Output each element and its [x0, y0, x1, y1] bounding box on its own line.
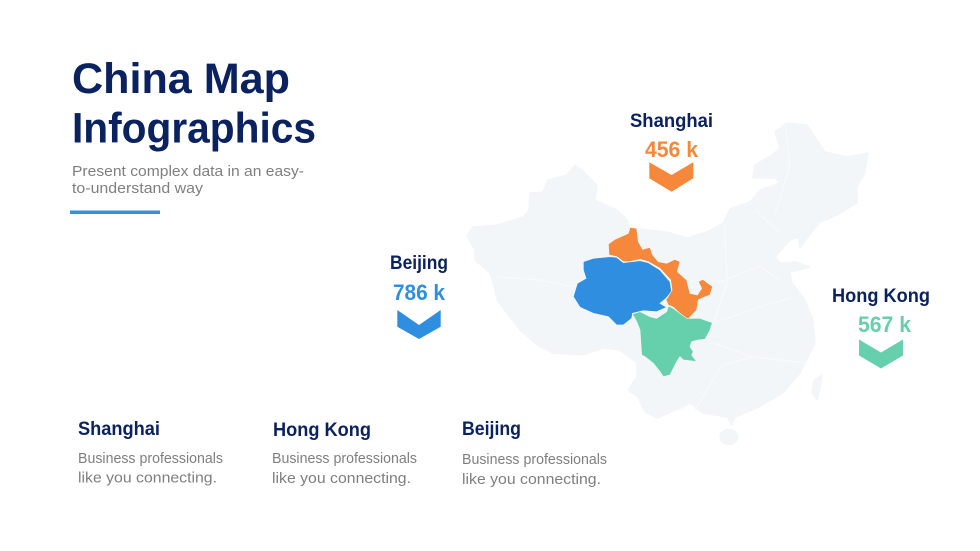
callout: Hong Kong: Hong Kong: [832, 286, 930, 307]
title underline accent: [70, 210, 160, 214]
text block: Hong Kong: Hong Kong: [273, 420, 371, 441]
icon: orange chevron: [649, 162, 693, 192]
map: faint province borders: [497, 125, 807, 413]
subtitle: to-understand way: [72, 181, 204, 197]
text block: Shanghai: Business professionals: [78, 451, 223, 467]
text block: Beijing: [462, 419, 607, 488]
title: Infographics: [72, 104, 316, 152]
icon: blue chevron: [397, 310, 441, 339]
callout: Shanghai: 456 k: [645, 137, 699, 162]
map region: Gansu, orange: [608, 227, 713, 319]
text block: Shanghai: [78, 419, 223, 486]
map: grey mainland, Hainan and Taiwan: [467, 123, 868, 444]
title: [72, 55, 316, 152]
map of China: [467, 123, 868, 444]
icon: green chevron: [859, 340, 903, 368]
callout: Beijing: Beijing: [390, 253, 448, 274]
text block: Hong Kong: [272, 420, 417, 487]
callout: Beijing: [390, 253, 448, 339]
callout: Shanghai: Shanghai: [630, 111, 713, 132]
text block: Hong Kong: Business professionals: [272, 451, 417, 467]
subtitle: Present complex data in an easy-: [72, 164, 304, 180]
callout: Shanghai: [630, 111, 713, 192]
text block: Beijing: Beijing: [462, 419, 521, 440]
callout: Beijing: 786 k: [393, 280, 446, 305]
text block: Hong Kong: like you connecting.: [272, 471, 411, 487]
callout: Hong Kong: [832, 286, 930, 368]
map region: Qinghai, blue: [573, 257, 672, 325]
text block: Shanghai: Shanghai: [78, 419, 160, 440]
text block: Beijing: like you connecting.: [462, 472, 601, 488]
map region: Sichuan, green: [632, 306, 712, 377]
text block: Shanghai: like you connecting.: [78, 470, 217, 486]
text block: Beijing: Business professionals: [462, 452, 607, 468]
callout: Hong Kong: 567 k: [858, 312, 912, 337]
subtitle: [72, 164, 304, 197]
title: China Map: [72, 55, 290, 103]
